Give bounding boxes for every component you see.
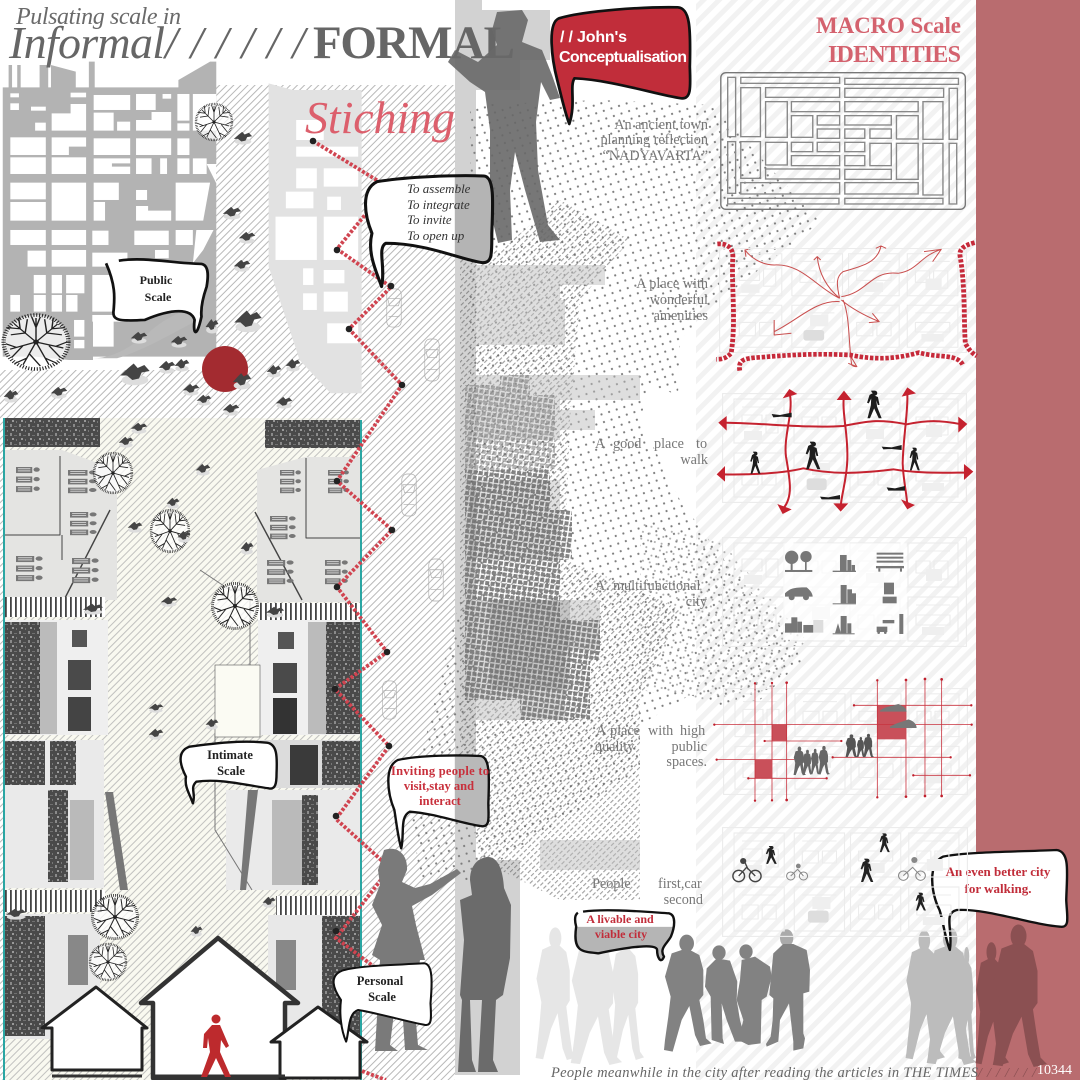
text: high quality public spaces: high [680,723,705,739]
text: multifunctional city: A [595,578,606,594]
icon: car [785,587,813,600]
text: good place to walk: place [654,436,684,452]
panel: people first [723,828,967,936]
callout: public scale: Public [140,273,173,287]
text: good place to walk: walk [680,452,709,468]
pale hatch ground: right column [696,0,976,1080]
heading: macro scale identities: IDENTITIES [828,42,961,68]
text: people first car second [592,876,703,908]
callout: an even better city [932,850,1067,950]
callout: personal scale: Scale [368,990,396,1004]
callout: intimate scale [181,742,277,803]
red public circle [202,346,248,392]
icon: cyclists [733,860,761,882]
icon: tower [833,555,856,572]
callout: inviting people [388,755,489,848]
silhouettes: people group [664,929,810,1052]
callout: personal scale: Personal [357,974,404,988]
text: ancient town: “NADYAVARTA” [603,148,708,164]
heading: macro scale identities [816,13,961,68]
silhouette: John presenting [448,10,560,243]
callout: John's Conceptualisation: Conceptualisation [559,49,687,66]
text: wonderful amenities: amenities [654,308,708,324]
text: high quality public spaces: place [610,723,640,739]
silhouettes: small groups [793,746,830,775]
silhouettes: people on crimson [975,925,1047,1067]
callout: a livable and viable city: A livable and [586,912,654,926]
text: high quality public spaces: spaces. [666,754,707,770]
callout: public scale: Scale [145,290,172,304]
text: multifunctional city: multifunctional [613,578,701,594]
callout: John's Conceptualisation: / / John's [560,29,627,46]
text: high quality public spaces [595,723,707,770]
text: wonderful amenities: A place with [636,276,708,292]
text: good place to walk: good [613,436,641,452]
callout: to assemble: To assemble [407,181,471,196]
right crimson band [976,0,1080,1080]
icon: trees [785,551,812,572]
callout: inviting people: visit,stay and [404,779,474,793]
stitching red dotted path [310,138,405,1080]
panel: mirrored facade plans (intimate scale) [3,418,362,1080]
frame: red dotted bracket [716,243,977,371]
callout: personal scale [334,963,432,1042]
icon: traffic light and car [877,614,903,634]
title: / / / / / / [162,17,309,68]
title: Informal [8,17,165,68]
callout: John's Conceptualisation [552,7,690,124]
text: high quality public spaces: A [596,723,607,739]
callout: an even better city: An even better city [946,864,1051,879]
map: dark figure-ground plan [3,62,216,360]
image id number: 10344 [1037,1063,1072,1078]
text: good place to walk: to [696,436,707,452]
text: ancient town [600,117,708,164]
icon: water tank [883,583,897,603]
text: good place to walk [595,436,709,468]
text: multifunctional city [595,578,708,610]
text: people first car second: People [592,876,631,892]
text: people first car second: second [664,892,703,908]
text: ancient town: planning reflection [600,132,708,148]
silhouettes: pale crowd [536,927,644,1065]
halftone city silhouette [410,100,820,900]
pedestrians seen from above [4,132,300,937]
callout: a livable and viable city: viable city [595,927,647,941]
trees [4,104,257,980]
callout: to assemble: To integrate [407,197,470,212]
callout: inviting people: interact [419,794,462,808]
panel: amenities plan with arrows [716,243,977,371]
heading: Stiching: Stiching [305,92,455,143]
callout: public scale [106,259,208,332]
title: Pulsating scale in [15,4,181,30]
callout: inviting people: Inviting people to [391,764,489,778]
panel: multifunctional city icons [723,538,966,646]
icon: cars [880,704,917,728]
text: high quality public spaces: quality [595,739,635,755]
text: people first car second: first,car [658,876,702,892]
text: high quality public spaces: public [672,739,707,755]
text: high quality public spaces: with [648,723,673,739]
callout: to assemble [365,176,493,287]
text: ancient town: An ancient town [614,117,708,133]
panel: quality public spaces [713,678,973,802]
icon: tower cluster [833,585,856,604]
silhouette: woman standing [458,857,511,1072]
houses section with red person [42,938,367,1078]
heading: macro scale identities: MACRO Scale [816,13,961,38]
map: faded plan [269,83,362,393]
silhouettes: people fading [906,927,976,1065]
icon: red walking person [201,1014,231,1077]
icon: tower with tree [833,616,855,634]
callout: to assemble: To open up [407,228,465,243]
callout: to assemble: To invite [407,212,452,227]
title: FORMAL [313,17,515,69]
text: wonderful amenities [636,276,708,324]
diagram: Nadyavarta plan [721,73,965,209]
gray vertical band with stepped top [455,0,550,1075]
parked cars outlines [383,289,443,719]
callout: intimate scale: Scale [217,764,245,778]
callout: an even better city: for walking. [965,881,1031,896]
icon: skyline [785,617,823,633]
callout: a livable and viable city [575,910,674,960]
silhouette: woman gesturing [372,849,461,1051]
title [8,4,515,69]
callout: intimate scale: Intimate [207,748,253,762]
text: wonderful amenities: wonderful [650,292,708,308]
diagonal hatch ground: left half [0,85,455,1080]
text: good place to walk: A [595,436,606,452]
text: multifunctional city: city [686,594,708,610]
icon: bench [876,553,904,572]
panel: walking streets [717,387,973,514]
